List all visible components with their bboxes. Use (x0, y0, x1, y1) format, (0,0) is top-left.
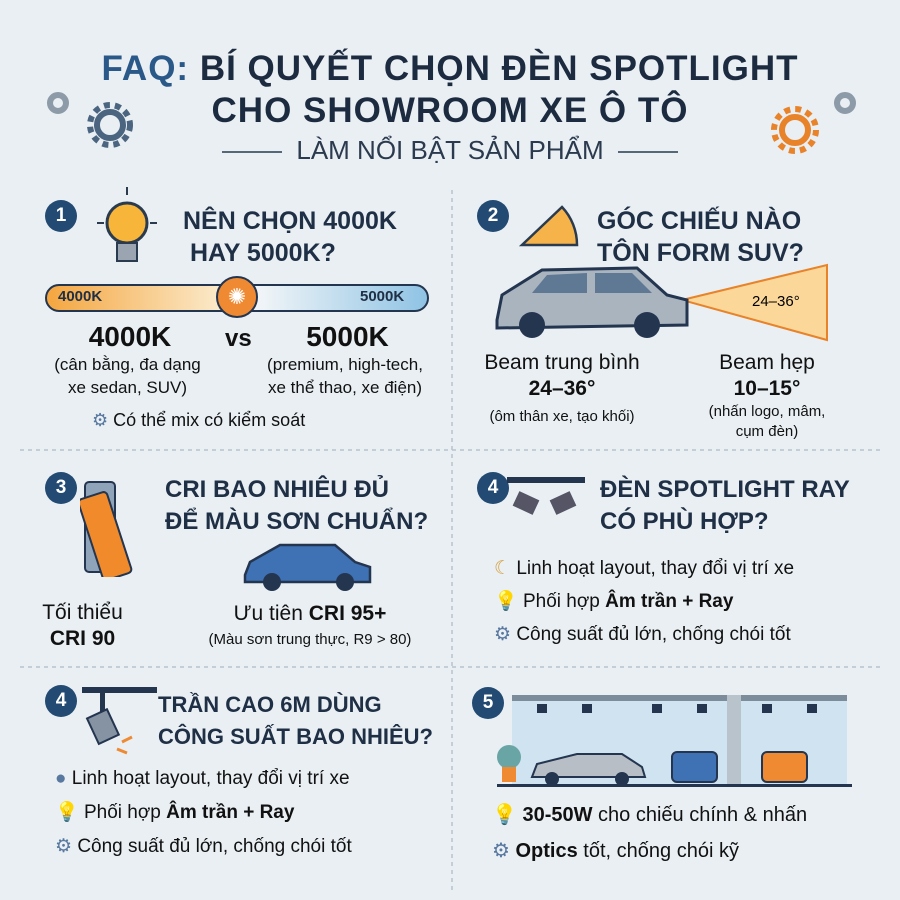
heading 4: ĐÈN SPOTLIGHT RAY (600, 476, 850, 503)
panel: 4 track spotlight (477, 472, 850, 645)
icon: bulb (97, 187, 157, 262)
beam medium: 24–36° (529, 377, 595, 400)
beam narrow: cụm đèn) (736, 423, 798, 440)
beam medium (484, 351, 640, 425)
badge 3 (45, 472, 77, 504)
preferred CRI: Ưu tiên CRI 95+ (234, 602, 386, 625)
badge 1: 1 (56, 205, 66, 226)
icon: spotlight (82, 687, 157, 754)
min CRI: Tối thiểu (42, 601, 123, 624)
preferred CRI: (Màu sơn trung thực, R9 > 80) (209, 631, 411, 648)
heading 3: ĐỂ MÀU SƠN CHUẨN? (165, 508, 428, 535)
list 5: ⚙ Optics tốt, chống chói kỹ (492, 840, 739, 862)
badge 2: 2 (488, 205, 498, 226)
panel: 1 color temperature: xe sedan, SUV) (68, 378, 187, 397)
icon: sun knob (216, 276, 258, 318)
min CRI: CRI 90 (50, 627, 115, 650)
panel: 1 color temperature: 4000K (58, 288, 102, 305)
panel: 1 color temperature: (cân bằng, đa dạng (54, 355, 201, 374)
badge 2 (477, 200, 509, 232)
min CRI (42, 601, 123, 650)
panel: 2 beam angle (477, 200, 828, 440)
beam narrow: Beam hẹp (719, 351, 815, 374)
title: CHO SHOWROOM XE Ô TÔ (212, 91, 688, 130)
beam medium: (ôm thân xe, tạo khối) (489, 408, 635, 425)
preferred CRI (209, 602, 411, 648)
panel: 1 color temperature: vs (225, 325, 252, 352)
panel: 1 color temperature: (premium, high-tech, (267, 355, 423, 374)
panel: 1 color temperature: 5000K (360, 288, 404, 305)
icon: track lights (507, 477, 585, 515)
heading 2 (597, 206, 804, 267)
list 4: ⚙ Công suất đủ lớn, chống chói tốt (494, 624, 791, 645)
panel: 1 color temperature (45, 187, 429, 430)
heading 4: CÓ PHÙ HỢP? (600, 508, 768, 535)
list 4b: ⚙ Công suất đủ lớn, chống chói tốt (55, 836, 352, 857)
badge 5: 5 (483, 692, 493, 713)
icon: sun knob: ✺ (228, 284, 246, 309)
heading 1: HAY 5000K? (190, 239, 336, 267)
title (101, 48, 799, 130)
icon: color swatch (80, 481, 132, 577)
icon: gears right (771, 92, 856, 154)
beam narrow: (nhấn logo, mâm, (709, 403, 825, 420)
badge 1 (45, 200, 77, 232)
heading 2: GÓC CHIẾU NÀO (597, 207, 801, 235)
badge 4b: 4 (56, 690, 66, 711)
list 5 (492, 803, 807, 862)
beam narrow (709, 351, 825, 440)
badge 4 (477, 472, 509, 504)
subtitle: LÀM NỔI BẬT SẢN PHẨM (296, 135, 604, 165)
beam medium: Beam trung bình (484, 351, 640, 374)
list 4b: ● Linh hoạt layout, thay đổi vị trí xe (55, 768, 350, 789)
illustration: SUV with beam: 24–36° (752, 293, 800, 310)
slider bar (45, 284, 429, 312)
icon: angle (519, 205, 578, 246)
list 4: 💡 Phối hợp Âm trần + Ray (494, 591, 733, 612)
panel: 5 showroom (472, 687, 852, 862)
heading 2: TÔN FORM SUV? (597, 239, 804, 267)
list 4 (494, 558, 794, 645)
illustration: SUV with beam (496, 264, 828, 342)
heading 4b: CÔNG SUẤT BAO NHIÊU? (158, 724, 433, 749)
icon: blue car (244, 544, 372, 591)
heading 3 (165, 475, 428, 535)
heading 4b: TRẦN CAO 6M DÙNG (158, 692, 382, 717)
panel: 4b high ceiling (45, 685, 433, 857)
list 5: 💡 30-50W cho chiếu chính & nhấn (492, 804, 807, 826)
badge 4: 4 (488, 477, 498, 498)
panel: 1 color temperature: 5000K (306, 321, 389, 352)
list 4: ☾ Linh hoạt layout, thay đổi vị trí xe (494, 558, 794, 579)
badge 3: 3 (56, 477, 66, 498)
note: ⚙ Có thể mix có kiểm soát (92, 410, 305, 430)
list 4b (55, 768, 352, 857)
panel: 1 color temperature: xe thể thao, xe điện) (268, 378, 422, 397)
beam narrow: 10–15° (734, 377, 800, 400)
heading 4 (600, 476, 850, 535)
illustration: showroom (497, 695, 852, 787)
heading 1 (183, 206, 397, 267)
badge 5 (472, 687, 504, 719)
heading 4b (158, 692, 433, 749)
comparison: 4000K (89, 321, 171, 352)
badge 4b (45, 685, 77, 717)
heading 1: NÊN CHỌN 4000K (183, 207, 397, 235)
panel: 3 CRI (42, 472, 428, 650)
list 4b: 💡 Phối hợp Âm trần + Ray (55, 802, 294, 823)
title: FAQ: BÍ QUYẾT CHỌN ĐÈN SPOTLIGHT (101, 49, 799, 88)
heading 3: CRI BAO NHIÊU ĐỦ (165, 476, 389, 503)
icon: gears left (47, 92, 133, 148)
